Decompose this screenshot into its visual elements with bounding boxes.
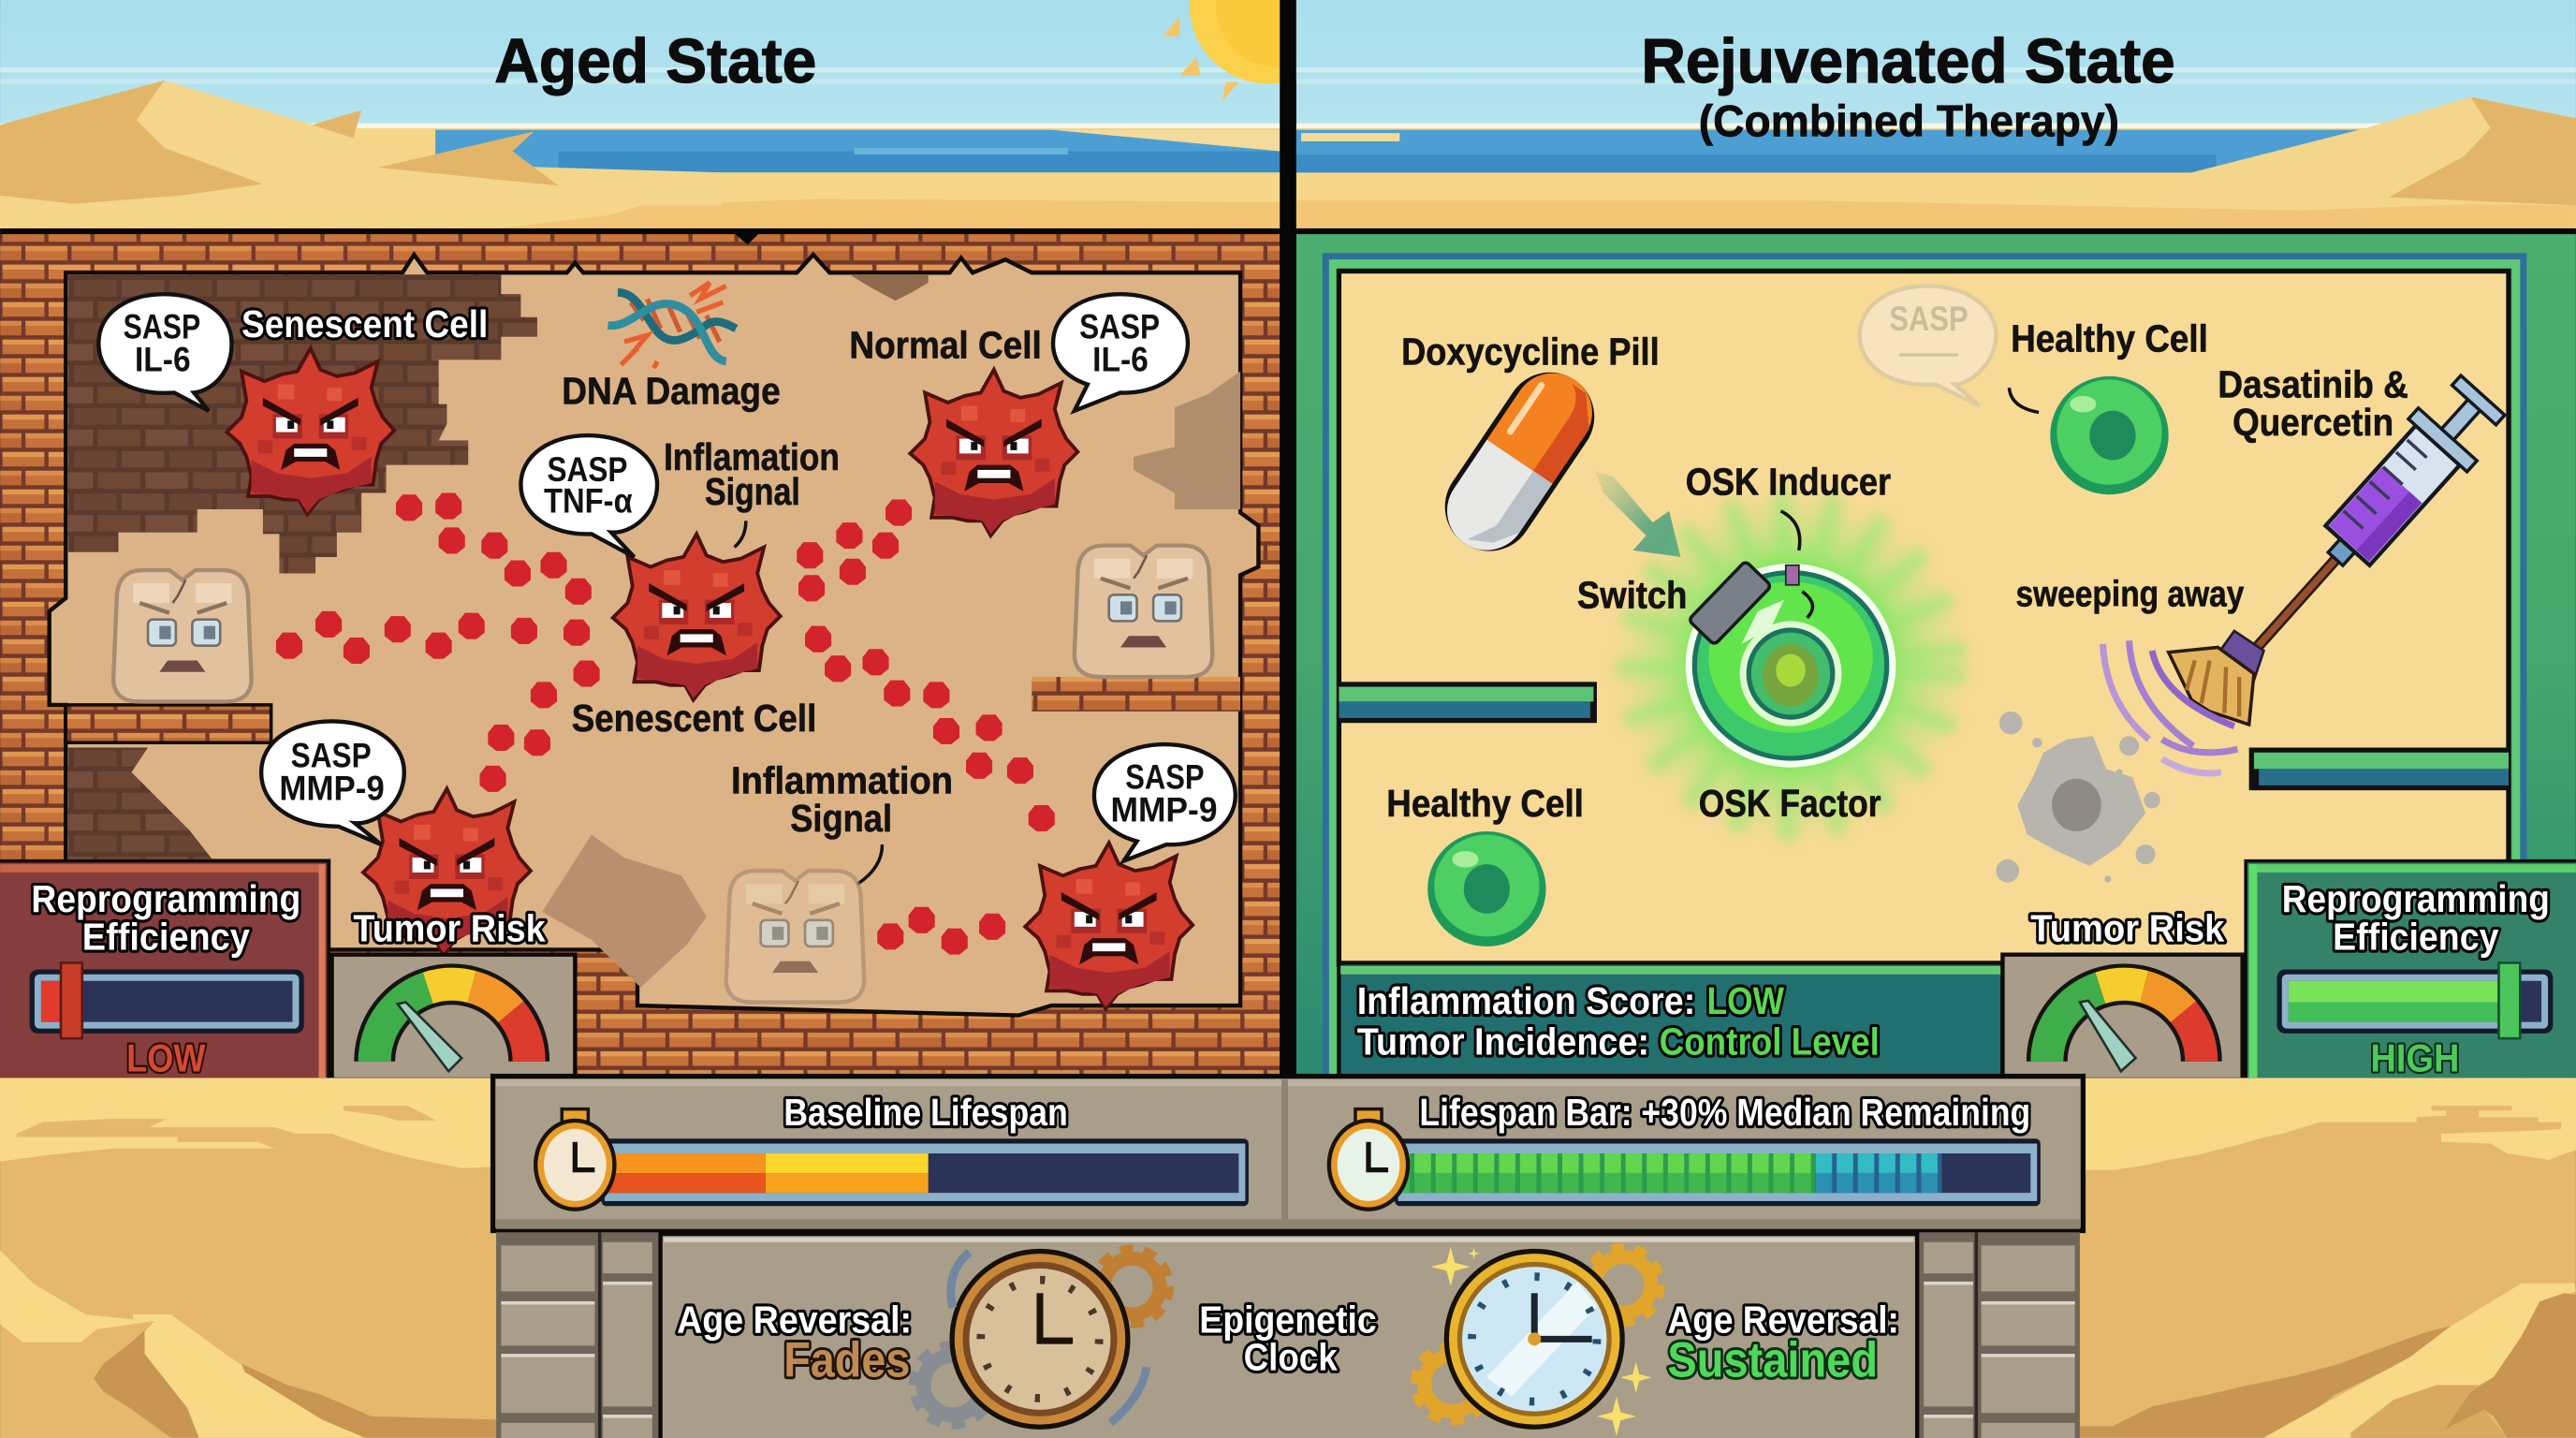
label: Healthy Cell lower: Healthy Cell [1386,782,1584,825]
inflammation particles [276,493,1055,955]
panel: Aged State tissue chamber [0,233,1280,1081]
panel: Reprogramming Efficiency low: LOW [126,1035,206,1079]
brick ledge right [1032,677,1240,712]
label: Age Reversal Fades: Fades [783,1333,910,1388]
panel: Inflammation and Tumor readout: Control Level [1660,1020,1880,1064]
panel: Inflammation and Tumor readout: Inflammation Score: [1357,979,1695,1022]
label: sweeping away: sweeping away [2015,575,2245,615]
label: OSK Factor: OSK Factor [1699,782,1881,825]
senescent cell lower right [1025,843,1193,1009]
bubble: SASP IL-6 right: IL-6 [1092,341,1149,379]
bar: Baseline Lifespan [601,1138,1249,1206]
panel: Inflammation and Tumor readout: Tumor Incidence: [1357,1020,1649,1064]
icon: healthy cell upper [2050,376,2169,494]
panel: bottom-right desert [2076,1078,2576,1438]
icon: pocket watch extended [1329,1109,1408,1210]
panel: bottom-left desert [0,1078,500,1438]
bubble: SASP MMP-9 left [261,721,404,844]
divider: center black bar and horizon line [0,0,2576,1078]
bubble: SASP MMP-9 right: SASP [1125,757,1204,796]
icon: DNA helix [607,283,736,368]
faded wall patch right [1134,372,1240,509]
icon: glowing OSK cell [1613,488,1969,843]
panel: Reprogramming Efficiency low [0,861,329,1081]
label: Baseline Lifespan: Baseline Lifespan [783,1091,1068,1134]
label: Dasatinib and Quercetin: Quercetin [2232,401,2393,444]
label: Inflamation Signal: Signal [705,470,800,513]
bubble: SASP MMP-9 left: MMP-9 [279,770,385,808]
bubble: faded SASP [1860,286,1996,405]
label: Inflammation Signal lower: Inflammation [731,759,953,802]
subtitle: Combined Therapy: (Combined Therapy) [1699,97,2119,147]
label: Inflammation Signal lower [731,759,953,884]
label: Age Reversal Fades [677,1298,912,1388]
label: Healthy Cell upper: Healthy Cell [2011,317,2208,360]
panel: Reprogramming Efficiency high: HIGH [2371,1035,2459,1079]
label: Lifespan Bar: Lifespan Bar: +30% Median Remaining [1419,1091,2030,1134]
panel: Reprogramming Efficiency high: Efficiency [2333,915,2499,958]
label: Age Reversal Sustained [1667,1298,1899,1388]
icon: aged clock with gears [915,1249,1168,1430]
icon: capsule pill [1427,355,1612,568]
label: Epigenetic Clock: Epigenetic [1199,1298,1377,1341]
icon: broom [2169,555,2339,725]
label: OSK Inducer [1686,460,1891,618]
tissue floor [50,255,1258,1016]
bubble: SASP IL-6 left [98,294,232,411]
label: Inflamation Signal [664,435,840,547]
icon: syringe [2306,369,2512,585]
label: Dasatinib and Quercetin: Dasatinib & [2217,363,2408,406]
damaged wall lower left [67,748,213,861]
panel: Reprogramming Efficiency high [2246,861,2576,1081]
bubble: faded SASP: SASP [1889,300,1969,338]
icon: sweep motion arcs [2102,640,2237,773]
green frame [1296,233,2576,1078]
bubble: SASP MMP-9 left: SASP [291,737,372,775]
label: OSK Inducer: OSK Inducer [1686,460,1891,503]
label: Tumor Risk aged: Tumor Risk [353,907,546,950]
label: Age Reversal Fades: Age Reversal: [677,1298,912,1341]
normal tissue cell right [1075,546,1212,677]
bubble: SASP IL-6 left: IL-6 [135,341,191,379]
title: Rejuvenated State: Rejuvenated State [1641,27,2175,96]
brick ledge left [66,705,271,742]
faded patch top [849,274,929,301]
label: Epigenetic Clock: Clock [1244,1336,1338,1379]
senescent cell lower left [363,788,531,955]
panel: epigenetic clock [661,1234,1917,1438]
gauge: Tumor Risk aged [332,955,575,1079]
bubble: SASP TNF-alpha: SASP [547,450,627,489]
faded patch lower [542,835,707,988]
bubble: SASP IL-6 right: SASP [1079,308,1160,346]
icon: pocket watch baseline [535,1109,614,1210]
arrow: pill to switch [1595,472,1680,557]
panel: Reprogramming Efficiency low: Reprogramming [31,877,300,920]
panel: Reprogramming Efficiency low: Efficiency [82,915,250,958]
icon: youthful clock with gears [1416,1247,1660,1436]
panel: Inflammation and Tumor readout: LOW [1707,979,1785,1022]
bubble: SASP TNF-alpha [520,435,657,557]
ledge right [2249,748,2509,790]
bar: Lifespan extended [1395,1138,2041,1206]
icon: cell dust cloud [1996,712,2160,882]
label: Inflammation Signal lower: Signal [790,797,892,840]
label: DNA Damage: DNA Damage [562,370,781,413]
icon: sun [1164,0,1347,102]
damaged wall upper left [67,274,537,574]
label: Switch: Switch [1577,573,1687,616]
label: Normal Cell: Normal Cell [849,324,1042,367]
panel: stone pillars right [1915,1232,2080,1438]
cream floor [1339,271,2509,964]
panel: Reprogramming Efficiency high: Reprogramming [2282,877,2550,920]
faded tissue cell lower [726,871,864,1003]
panel: Inflammation and Tumor readout [1339,962,2002,1079]
label: Age Reversal Sustained: Sustained [1667,1333,1878,1388]
senescent cell upper right [910,370,1077,536]
label: Inflamation Signal: Inflamation [664,435,840,478]
panel: lifespan bars [493,1077,2083,1231]
bubble: SASP MMP-9 right [1094,744,1236,861]
panel: stone pillars left [496,1232,661,1438]
senescent cell upper left [227,348,394,514]
label: Epigenetic Clock [1199,1298,1377,1379]
brick wall frame [0,233,1280,1078]
bubble: SASP TNF-alpha: TNF-α [544,482,633,521]
bubble: SASP MMP-9 right: MMP-9 [1110,791,1218,829]
panel: Rejuvenated State tissue chamber [1296,233,2576,1084]
label: Age Reversal Sustained: Age Reversal: [1667,1298,1899,1341]
label: Senescent Cell center: Senescent Cell [572,697,816,740]
label: Dasatinib and Quercetin [2217,363,2408,444]
icon: healthy cell lower [1427,831,1546,946]
senescent cell center [613,534,781,700]
normal tissue cell left [113,570,252,701]
panel: Aged State scene header [0,0,1347,233]
label: Healthy Cell upper [2009,317,2208,413]
label: Tumor Risk rejuvenated: Tumor Risk [2030,907,2225,950]
label: Doxycycline Pill: Doxycycline Pill [1401,330,1660,374]
ledge left [1339,682,1597,723]
title: Aged State: Aged State [494,27,816,96]
bubble: SASP IL-6 left: SASP [124,308,200,346]
icon: switch [1689,561,1771,645]
panel: Rejuvenated State scene header [1296,0,2576,233]
gauge: Tumor Risk rejuvenated [2002,955,2243,1079]
label: Senescent Cell top: Senescent Cell [242,302,488,345]
bubble: SASP IL-6 right [1053,294,1188,411]
